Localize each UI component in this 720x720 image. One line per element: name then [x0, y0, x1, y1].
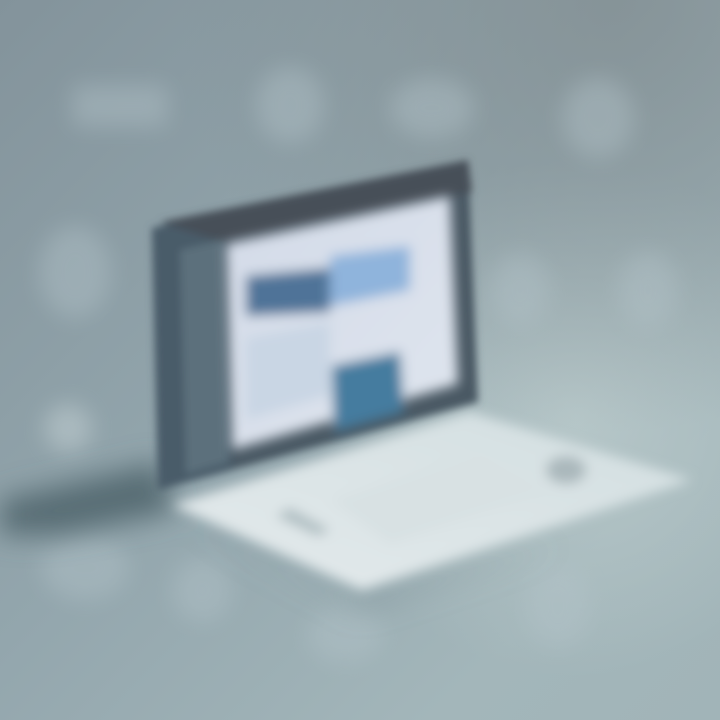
laptop keyboard base — [172, 412, 692, 590]
screen: light blue block — [330, 246, 410, 306]
laptop — [152, 160, 692, 590]
screen: dark blue block — [246, 268, 330, 316]
screen: teal block — [332, 352, 404, 432]
laptop lid frame — [152, 160, 478, 490]
laptop screen — [226, 196, 458, 450]
floating blurred icons — [39, 67, 678, 663]
screen: pale row — [246, 322, 330, 420]
laptop shadow — [0, 462, 560, 610]
